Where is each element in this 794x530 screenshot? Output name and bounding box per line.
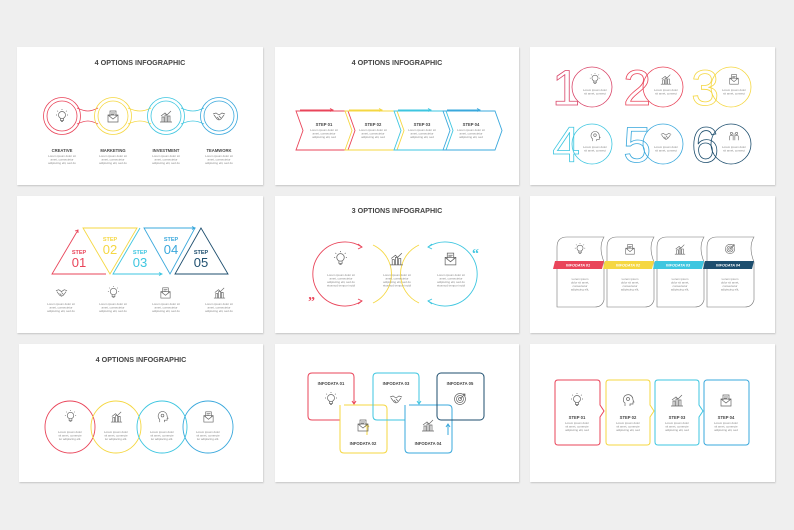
icons and text: Lorem ipsum dolor sit (47, 302, 75, 306)
step labels: Lorem ipsum dolor sit (457, 128, 485, 132)
icons and text: Lorem ipsum dolor (104, 430, 128, 434)
labels: MARKETING (100, 148, 126, 153)
circle: investment (148, 98, 184, 134)
icons and text: adipiscing elit, sed do (437, 280, 465, 284)
panel: 4 options circles (17, 47, 263, 185)
boxes (308, 373, 484, 453)
icons and text: tur adipiscing elit. (105, 437, 127, 441)
labels: Lorem ipsum dolor sit (99, 154, 127, 158)
card icons and text: adipiscing elit, (721, 288, 739, 292)
panel: numbers 1-6 (530, 47, 775, 185)
icons and text: adipiscing elit, sed do (327, 280, 355, 284)
step labels: STEP 03 (414, 122, 431, 127)
step labels and icons: adipiscing elit, sed (616, 428, 640, 432)
step numbers: STEP (194, 250, 209, 256)
icons and text: adipiscing elit, sed do (99, 309, 127, 313)
title: 3 OPTIONS INFOGRAPHIC (352, 206, 442, 215)
icons and text: tur adipiscing elit. (59, 437, 81, 441)
step labels: Lorem ipsum dolor sit (408, 128, 436, 132)
icons and text: tur adipiscing elit. (151, 437, 173, 441)
step labels (310, 122, 485, 139)
card icons and text: dolor sit amet, (621, 280, 639, 284)
quote marks: “ (472, 247, 479, 262)
numbers outline: 4 (552, 117, 580, 173)
icons and text: Lorem ipsum dolor sit (327, 273, 355, 277)
step labels: adipiscing elit, sed (459, 135, 483, 139)
icons and text: Lorem ipsum dolor (58, 430, 82, 434)
card icons and text: dolor sit amet, (721, 280, 739, 284)
step labels and icons: adipiscing elit, sed (665, 428, 689, 432)
chain connectors (77, 108, 204, 124)
icons and text: amet, consectetur (386, 276, 409, 280)
icons and text: Lorem ipsum dolor (150, 430, 174, 434)
icons and text: sit amet, consecte (196, 434, 220, 438)
icons and text: sit amet, consecte (58, 434, 82, 438)
panel: 4 options chevrons (275, 47, 519, 185)
step labels and icons: STEP 02 (620, 415, 637, 420)
number icons and text: Lorem ipsum dolor (722, 145, 746, 149)
labels (48, 148, 233, 165)
numbers outline: 5 (623, 117, 651, 173)
icons and text (327, 251, 465, 288)
number icons and text: Lorem ipsum dolor (583, 145, 607, 149)
icons and text: Lorem ipsum dolor sit (152, 302, 180, 306)
card icons and text: dolor sit amet, (671, 280, 689, 284)
labels: amet, consectetur (208, 158, 231, 162)
icons and text: Lorem ipsum dolor sit (383, 273, 411, 277)
step labels: Lorem ipsum dolor sit (310, 128, 338, 132)
step labels and icons: Lorem ipsum dolor (665, 421, 689, 425)
box labels and icons: INFODATA 04 (415, 441, 442, 446)
card icons and text: Lorem ipsum (672, 277, 689, 281)
number icons and text: Lorem ipsum dolor (722, 88, 746, 92)
step labels and icons: Lorem ipsum dolor (565, 421, 589, 425)
icons and text: amet, consectetur (330, 276, 353, 280)
icons and text: tur adipiscing elit. (197, 437, 219, 441)
icons and text: adipiscing elit, sed do (205, 309, 233, 313)
step numbers: STEP (72, 250, 87, 256)
card icons and text: Lorem ipsum (622, 277, 639, 281)
card icons and text: adipiscing elit, (671, 288, 689, 292)
number icons and text: sit amet, consect (655, 92, 677, 96)
step numbers: STEP (133, 250, 148, 256)
circle: marketing (94, 98, 132, 134)
step labels: amet, consectetur (313, 132, 336, 136)
icons and text: amet, consectetur (440, 276, 463, 280)
banners (553, 261, 754, 269)
number icons and text: sit amet, consect (655, 148, 677, 152)
banners: INFODATA 04 (716, 264, 741, 268)
boxes (555, 380, 749, 445)
numbers outline: 6 (691, 117, 719, 173)
labels: TEAMWORK (206, 148, 232, 153)
labels: CREATIVE (52, 148, 73, 153)
labels: adipiscing elit, sed do (205, 161, 233, 165)
box labels and icons: INFODATA 03 (383, 381, 410, 386)
box labels and icons: INFODATA 02 (350, 441, 377, 446)
step labels and icons: Lorem ipsum dolor (714, 421, 738, 425)
panel: triangles steps (17, 196, 263, 333)
icons and text: Lorem ipsum dolor (196, 430, 220, 434)
panel: infodata boxes (275, 344, 519, 482)
labels: adipiscing elit, sed do (48, 161, 76, 165)
number icons and text: Lorem ipsum dolor (654, 145, 678, 149)
banners: INFODATA 02 (616, 264, 641, 268)
panel: step boxes (530, 344, 775, 482)
icons and text: adipiscing elit, sed do (383, 280, 411, 284)
labels: adipiscing elit, sed do (152, 161, 180, 165)
icons and text: amet, consectetur (155, 306, 178, 310)
step labels: adipiscing elit, sed (361, 135, 385, 139)
step labels and icons: adipiscing elit, sed (565, 428, 589, 432)
number icons and text: sit amet, consect (723, 92, 745, 96)
numbers outline: 1 (552, 60, 580, 116)
icons and text (47, 286, 233, 313)
panel: infodata cards (530, 196, 775, 333)
card icons and text: consectetur (673, 284, 688, 288)
number icons and text: sit amet, consect (584, 92, 606, 96)
icons and text: Lorem ipsum dolor sit (205, 302, 233, 306)
card icons and text: adipiscing elit, (621, 288, 639, 292)
step labels and icons: sit amet, consecte (665, 424, 689, 428)
step labels and icons: STEP 03 (669, 415, 686, 420)
circles (45, 401, 233, 453)
labels: Lorem ipsum dolor sit (48, 154, 76, 158)
labels: INVESTMENT (152, 148, 180, 153)
step labels and icons (565, 393, 738, 432)
step labels and icons: Lorem ipsum dolor (616, 421, 640, 425)
step numbers: 03 (133, 255, 147, 270)
icons and text: eiusmod tempor incidi (327, 284, 355, 288)
step numbers: 01 (72, 255, 86, 270)
card icons and text: adipiscing elit, (571, 288, 589, 292)
step labels and icons: sit amet, consecte (565, 424, 589, 428)
number icons and text: Lorem ipsum dolor (654, 88, 678, 92)
icons and text: amet, consectetur (50, 306, 73, 310)
step numbers: STEP (164, 237, 179, 243)
number icons and text: sit amet, consect (584, 148, 606, 152)
numbers outline: 2 (623, 60, 651, 116)
labels: amet, consectetur (102, 158, 125, 162)
labels: Lorem ipsum dolor sit (152, 154, 180, 158)
banners: INFODATA 01 (566, 264, 590, 268)
step labels and icons: STEP 04 (718, 415, 735, 420)
step labels: adipiscing elit, sed (410, 135, 434, 139)
icons and text: adipiscing elit, sed do (47, 309, 75, 313)
icons and text: amet, consectetur (102, 306, 125, 310)
card icons and text: Lorem ipsum (722, 277, 739, 281)
cards (557, 237, 754, 307)
arc circles (313, 242, 477, 306)
panel: 4 options overlapping circles (19, 344, 263, 482)
step labels and icons: adipiscing elit, sed (714, 428, 738, 432)
icons and text: Lorem ipsum dolor sit (99, 302, 127, 306)
step numbers: 02 (103, 242, 117, 257)
triangles (52, 226, 228, 276)
labels: adipiscing elit, sed do (99, 161, 127, 165)
circle: creative (44, 98, 80, 134)
step labels: amet, consectetur (460, 132, 483, 136)
card icons and text: consectetur (623, 284, 638, 288)
card icons and text: consectetur (723, 284, 738, 288)
circle: teamwork (200, 98, 238, 134)
step labels and icons: sit amet, consecte (616, 424, 640, 428)
step numbers: 04 (164, 242, 178, 257)
box labels and icons: INFODATA 05 (447, 381, 474, 386)
quote marks: ” (308, 295, 315, 310)
step labels: STEP 02 (365, 122, 382, 127)
icons and text: eiusmod tempor incidi (437, 284, 465, 288)
step labels: STEP 04 (463, 122, 480, 127)
icons and text: adipiscing elit, sed do (152, 309, 180, 313)
step labels: amet, consectetur (362, 132, 385, 136)
labels: amet, consectetur (51, 158, 74, 162)
icons and text: sit amet, consecte (104, 434, 128, 438)
chevron steps (296, 108, 502, 150)
step numbers (72, 237, 209, 270)
banners: INFODATA 03 (666, 264, 691, 268)
number icons and text (583, 73, 746, 152)
card icons and text: Lorem ipsum (572, 277, 589, 281)
step labels: Lorem ipsum dolor sit (359, 128, 387, 132)
title: 4 OPTIONS INFOGRAPHIC (95, 58, 185, 67)
step labels and icons: STEP 01 (569, 415, 586, 420)
number icons and text: Lorem ipsum dolor (583, 88, 607, 92)
step labels: amet, consectetur (411, 132, 434, 136)
card icons and text: dolor sit amet, (571, 280, 589, 284)
title: 4 OPTIONS INFOGRAPHIC (352, 58, 442, 67)
step labels: STEP 01 (316, 122, 333, 127)
number icons and text: sit amet, consect (723, 148, 745, 152)
card icons and text: consectetur (573, 284, 588, 288)
step labels: adipiscing elit, sed (312, 135, 336, 139)
card icons and text (571, 243, 739, 292)
step numbers: STEP (103, 237, 118, 243)
labels: Lorem ipsum dolor sit (205, 154, 233, 158)
numbers outline: 3 (691, 60, 719, 116)
icons and text: sit amet, consecte (150, 434, 174, 438)
step numbers: 05 (194, 255, 208, 270)
icons and text (58, 410, 220, 441)
quote marks (308, 247, 479, 310)
labels: amet, consectetur (155, 158, 178, 162)
box labels and icons: INFODATA 01 (318, 381, 345, 386)
icons and text: Lorem ipsum dolor sit (437, 273, 465, 277)
icons and text: amet, consectetur (208, 306, 231, 310)
step labels and icons: sit amet, consecte (714, 424, 738, 428)
panel: 3 options circles (275, 196, 519, 333)
box labels and icons (318, 381, 474, 446)
icons and text: eiusmod tempor incidi (383, 284, 411, 288)
numbers outline (552, 60, 751, 173)
title: 4 OPTIONS INFOGRAPHIC (96, 355, 186, 364)
